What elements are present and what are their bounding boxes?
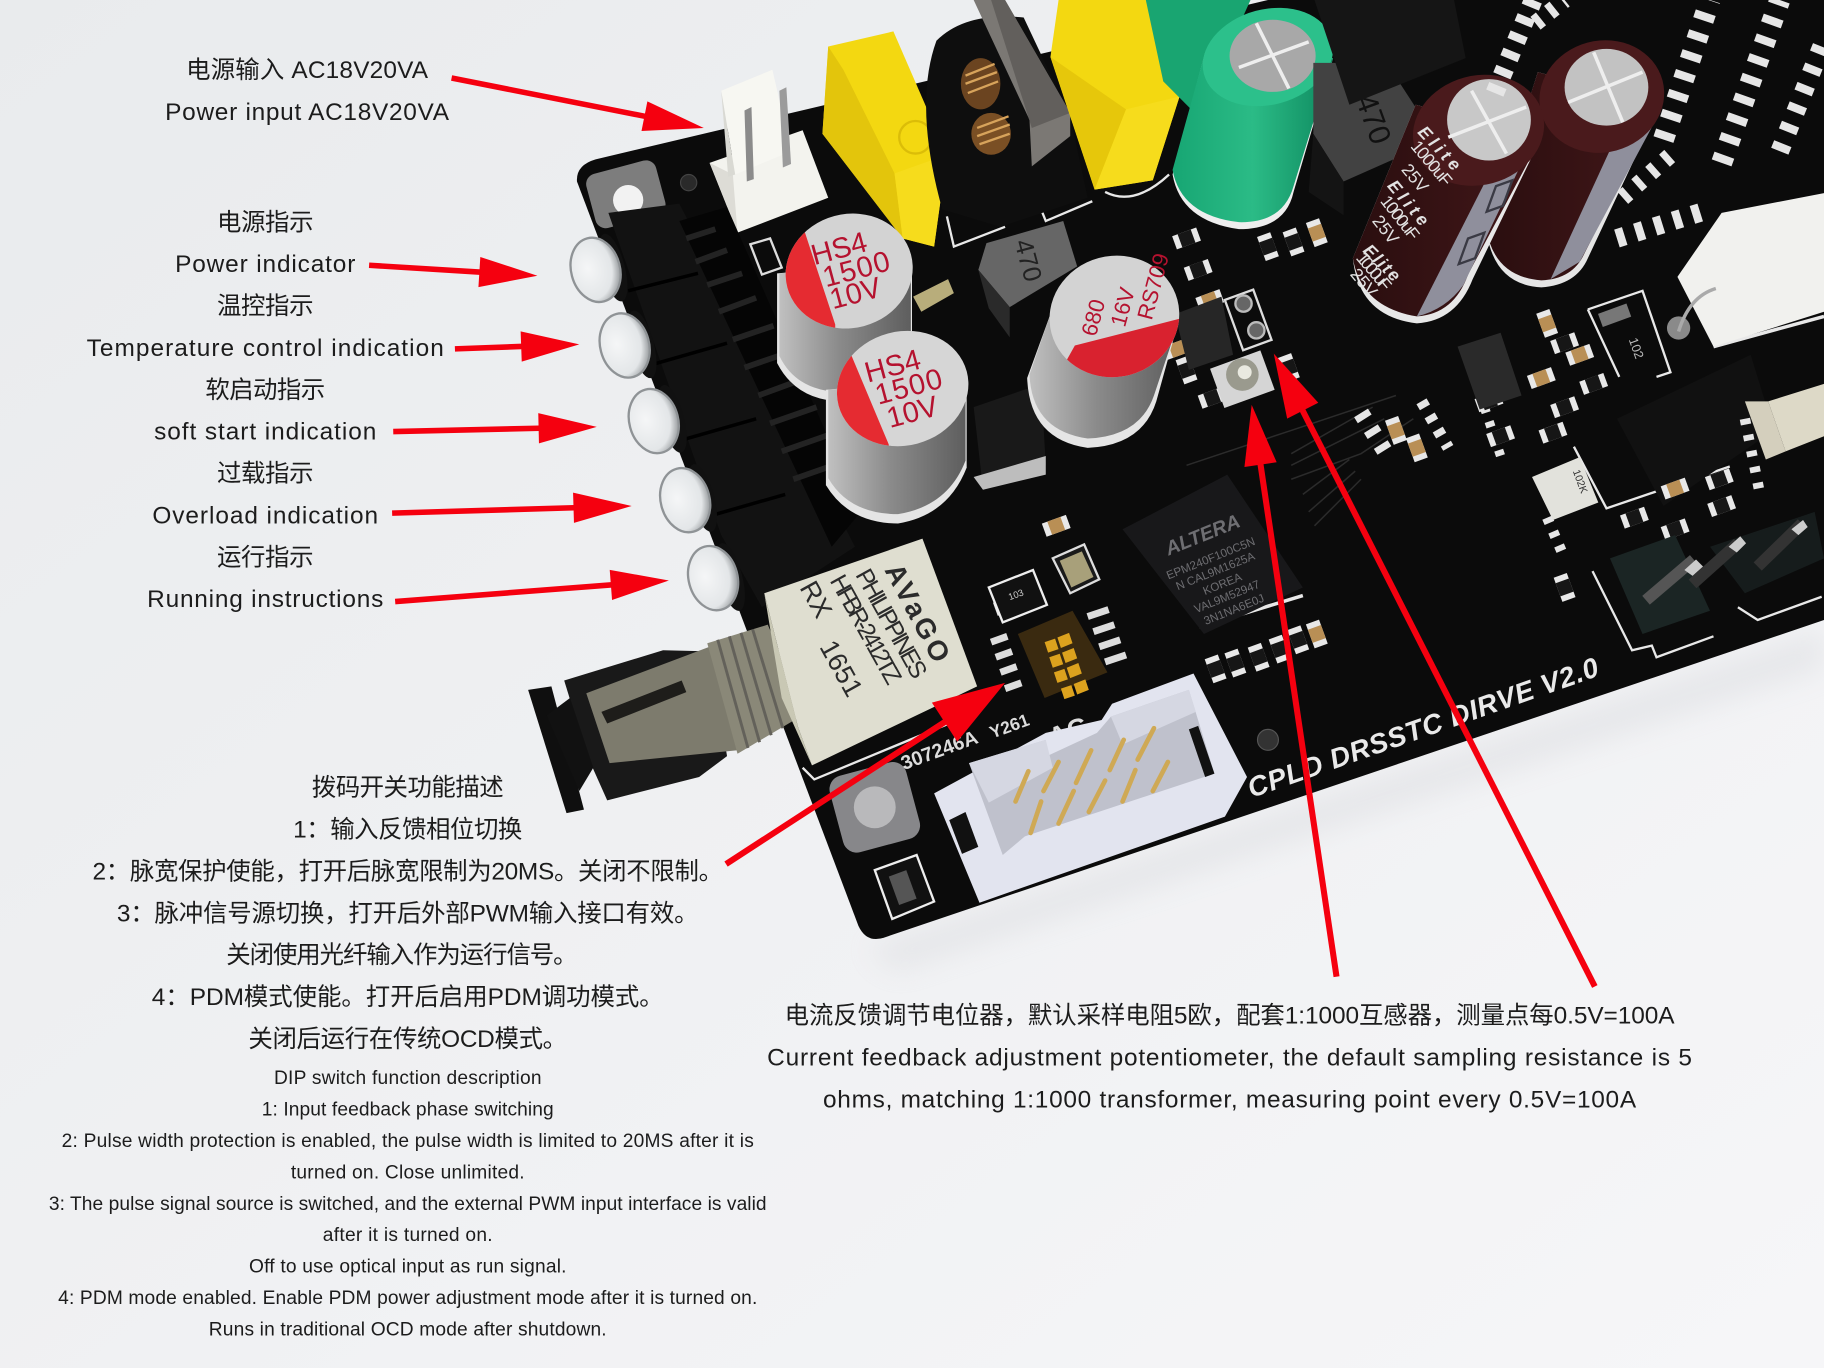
capacitor 680 16V RS709: RS709 bbox=[1132, 251, 1174, 322]
two-pin test point bbox=[1225, 290, 1272, 350]
front electrolytic capacitor: 25V bbox=[1398, 160, 1433, 196]
Altera CPLD chip: 3N1NA6E0J bbox=[1202, 592, 1266, 628]
DIP switch bbox=[991, 610, 1126, 699]
capacitor HS4 1500 10V upper: HS4 bbox=[808, 226, 871, 272]
text block: DIP switch description in English: DIP switch function description bbox=[274, 1068, 542, 1089]
label: power input: 电源输入 AC18V20VA bbox=[186, 57, 429, 84]
mounting hole: bottom left bbox=[826, 759, 923, 856]
mounting hole: top left bbox=[584, 158, 697, 231]
yellow film capacitor right bbox=[1050, 0, 1180, 190]
text block: DIP switch description in English: after it is turned on. bbox=[323, 1225, 493, 1246]
capacitor HS4 1500 10V upper bbox=[777, 214, 913, 400]
text block: DIP switch description in Chinese: 1：输入反馈相位切换 bbox=[293, 817, 522, 844]
label: power input: Power input AC18V20VA bbox=[165, 99, 450, 126]
board via near title bbox=[1257, 729, 1278, 750]
text block: current feedback potentiometer bbox=[767, 1003, 1692, 1113]
label: LED indicators: 软启动指示 bbox=[205, 377, 325, 404]
black SMD diode bbox=[913, 279, 1046, 490]
arrow: potentiometer bbox=[1236, 402, 1353, 979]
green electrolytic capacitor bbox=[1173, 0, 1344, 229]
right pin header bbox=[1610, 512, 1824, 634]
Altera CPLD chip: KOREA bbox=[1201, 570, 1244, 598]
capacitor HS4 1500 10V lower: 10V bbox=[883, 390, 942, 435]
label: LED indicators: Temperature control indication bbox=[87, 335, 444, 362]
front electrolytic capacitor bbox=[1346, 60, 1557, 323]
LED indicators bbox=[564, 231, 751, 616]
text block: current feedback potentiometer: 电流反馈调节电位器，默认采样电阻5欧，配套1:1000互感器，测量点每0.5V=100A bbox=[785, 1003, 1675, 1030]
text block: current feedback potentiometer: ohms, matching 1:1000 transformer, measuring point every 0.5V=100A bbox=[823, 1086, 1637, 1113]
text block: DIP switch description in Chinese: 关闭后运行在传统OCD模式。 bbox=[248, 1026, 567, 1053]
capacitor HS4 1500 10V upper: 10V bbox=[826, 272, 885, 316]
capacitor HS4 1500 10V upper: 1500 bbox=[819, 245, 895, 294]
103 resistor network bbox=[989, 570, 1047, 622]
arrow: test point bbox=[1258, 346, 1610, 994]
front electrolytic capacitor: Elite bbox=[1414, 122, 1465, 175]
label: LED indicators: 电源指示 bbox=[217, 209, 314, 236]
black transistor upper right bbox=[1617, 355, 1774, 506]
arrow: temperature control bbox=[454, 329, 580, 364]
Altera CPLD chip: VAL9M52947 bbox=[1192, 578, 1262, 616]
resistor network bottom left bbox=[875, 855, 934, 919]
arrow: power input bbox=[449, 63, 707, 143]
text block: DIP switch description in English: Runs in traditional OCD mode after shutdown. bbox=[209, 1319, 607, 1340]
label: LED indicators: 过载指示 bbox=[217, 461, 314, 488]
102 resistor: 102 bbox=[1626, 336, 1647, 361]
text block: DIP switch description in English: 2: Pulse width protection is enabled, the pulse width is limited to 20MS after it is bbox=[62, 1131, 754, 1152]
front electrolytic capacitor: Elite bbox=[1359, 240, 1405, 286]
front electrolytic capacitor: 25V bbox=[1368, 211, 1403, 248]
capacitor HS4 1500 10V lower: HS4 bbox=[861, 344, 924, 389]
text block: DIP switch description in English: 3: The pulse signal source is switched, and the external PWM input interface is valid bbox=[49, 1194, 767, 1215]
text block: DIP switch description in English: 1: Input feedback phase switching bbox=[262, 1100, 554, 1121]
capacitor 680 16V RS709 bbox=[1027, 254, 1180, 448]
heat sink transistor row bbox=[608, 204, 861, 607]
label: LED indicators: 温控指示 bbox=[217, 293, 314, 320]
Avago fiber receiver: PHILIPPINES bbox=[850, 564, 932, 683]
inductor 470 left: 470 bbox=[1009, 236, 1047, 285]
capacitor 680 16V RS709: 680 bbox=[1076, 297, 1110, 339]
silk label: Y261: Y261 bbox=[987, 710, 1032, 742]
circuit board bbox=[577, 0, 1824, 939]
arrow: power indicator bbox=[368, 250, 538, 291]
Altera CPLD chip: ALTERA bbox=[1161, 510, 1243, 561]
front electrolytic capacitor: 1000uF bbox=[1407, 136, 1457, 190]
power input connector bbox=[710, 70, 828, 275]
inductor 470 left bbox=[978, 221, 1077, 337]
text block: DIP switch description in English: 4: PDM mode enabled. Enable PDM power adjustment mode after it is turned on. bbox=[58, 1288, 757, 1309]
label: LED indicators: Power indicator bbox=[175, 251, 355, 278]
label: LED indicators: Overload indication bbox=[152, 502, 378, 529]
front electrolytic capacitor: Elite bbox=[1384, 176, 1433, 230]
text block: current feedback potentiometer: Current feedback adjustment potentiometer, the default sampling resistance is 5 bbox=[767, 1045, 1692, 1072]
text block: DIP switch description in English: Off to use optical input as run signal. bbox=[249, 1257, 567, 1278]
label: power input bbox=[165, 57, 450, 126]
front electrolytic capacitor: 1000uF bbox=[1376, 191, 1424, 244]
Avago fiber receiver: AVaGO bbox=[879, 558, 956, 667]
trimmer potentiometer bbox=[1210, 350, 1275, 408]
arrow: DIP switch bbox=[713, 663, 1018, 884]
trace lines bbox=[1187, 396, 1413, 526]
opto couplers: 102K bbox=[1570, 468, 1589, 495]
inductor 470 right bbox=[1309, 63, 1419, 215]
dark rear electrolytic capacitor bbox=[1487, 26, 1677, 287]
label: LED indicators bbox=[87, 209, 444, 613]
text block: DIP switch description in Chinese: 2：脉宽保护使能，打开后脉宽限制为20MS。关闭不限制。 bbox=[92, 858, 723, 885]
silk label: part number: 307246A bbox=[898, 727, 981, 775]
JTAG 10-pin box header bbox=[934, 674, 1247, 903]
capacitor HS4 1500 10V lower: 1500 bbox=[872, 363, 947, 412]
silkscreen outlines bbox=[803, 174, 1824, 779]
text block: DIP switch description in Chinese: 关闭使用光纤输入作为运行信号。 bbox=[226, 942, 578, 969]
white power resistor bbox=[1667, 193, 1824, 347]
crystal oscillator bbox=[1053, 544, 1099, 593]
Altera CPLD chip: N CAL9M1625A bbox=[1174, 550, 1257, 593]
text block: DIP switch description in English bbox=[49, 1068, 767, 1340]
Altera CPLD chip bbox=[1123, 475, 1303, 634]
text block: DIP switch description in Chinese: 4：PDM模式使能。打开后启用PDM调功模式。 bbox=[152, 984, 664, 1011]
Avago fiber receiver: 1651 bbox=[814, 635, 869, 702]
Altera CPLD chip: EPM240F100C5N bbox=[1165, 535, 1257, 582]
arrow: soft start bbox=[393, 412, 597, 447]
green capacitor rear bbox=[1146, 0, 1251, 116]
arrow: running bbox=[394, 565, 670, 617]
board title silkscreen: CPLD DRSSTC DIRVE V2.0 bbox=[1243, 651, 1603, 804]
Avago fiber receiver: RX bbox=[794, 576, 838, 623]
front electrolytic capacitor: 1000uF bbox=[1352, 248, 1396, 295]
chip 4984 bbox=[1175, 0, 1522, 409]
opto couplers bbox=[1532, 384, 1824, 520]
label: LED indicators: soft start indication bbox=[154, 419, 376, 446]
text block: DIP switch description in Chinese bbox=[92, 775, 723, 1053]
text block: DIP switch description in Chinese: 拨码开关功能描述 bbox=[312, 775, 504, 802]
102 resistor bbox=[1598, 304, 1647, 361]
front electrolytic capacitor: 25V bbox=[1346, 264, 1382, 301]
board shadow bbox=[867, 628, 1824, 971]
Avago fiber receiver bbox=[764, 539, 977, 765]
capacitor 680 16V RS709: 16V bbox=[1106, 285, 1140, 329]
silk label: JTAG: AG bbox=[1045, 711, 1093, 752]
text block: DIP switch description in English: turned on. Close unlimited. bbox=[291, 1162, 525, 1183]
SMD resistors and capacitors bbox=[993, 218, 1736, 683]
Avago fiber receiver: HFBR-2412TZ bbox=[824, 570, 906, 689]
label: LED indicators: Running instructions bbox=[147, 586, 383, 613]
SMD pads upper right area bbox=[1338, 0, 1822, 558]
arrow: overload bbox=[392, 491, 632, 528]
label: LED indicators: 运行指示 bbox=[217, 544, 314, 571]
103 resistor network: 103 bbox=[1007, 587, 1025, 602]
text block: DIP switch description in Chinese: 3：脉冲信号源切换，打开后外部PWM输入接口有效。 bbox=[117, 900, 699, 927]
common mode choke bbox=[926, 0, 1088, 227]
capacitor HS4 1500 10V lower bbox=[826, 330, 968, 524]
yellow film capacitor left bbox=[822, 31, 947, 247]
fiber connector bbox=[528, 625, 806, 813]
inductor 470 right: 470 bbox=[1349, 90, 1397, 149]
